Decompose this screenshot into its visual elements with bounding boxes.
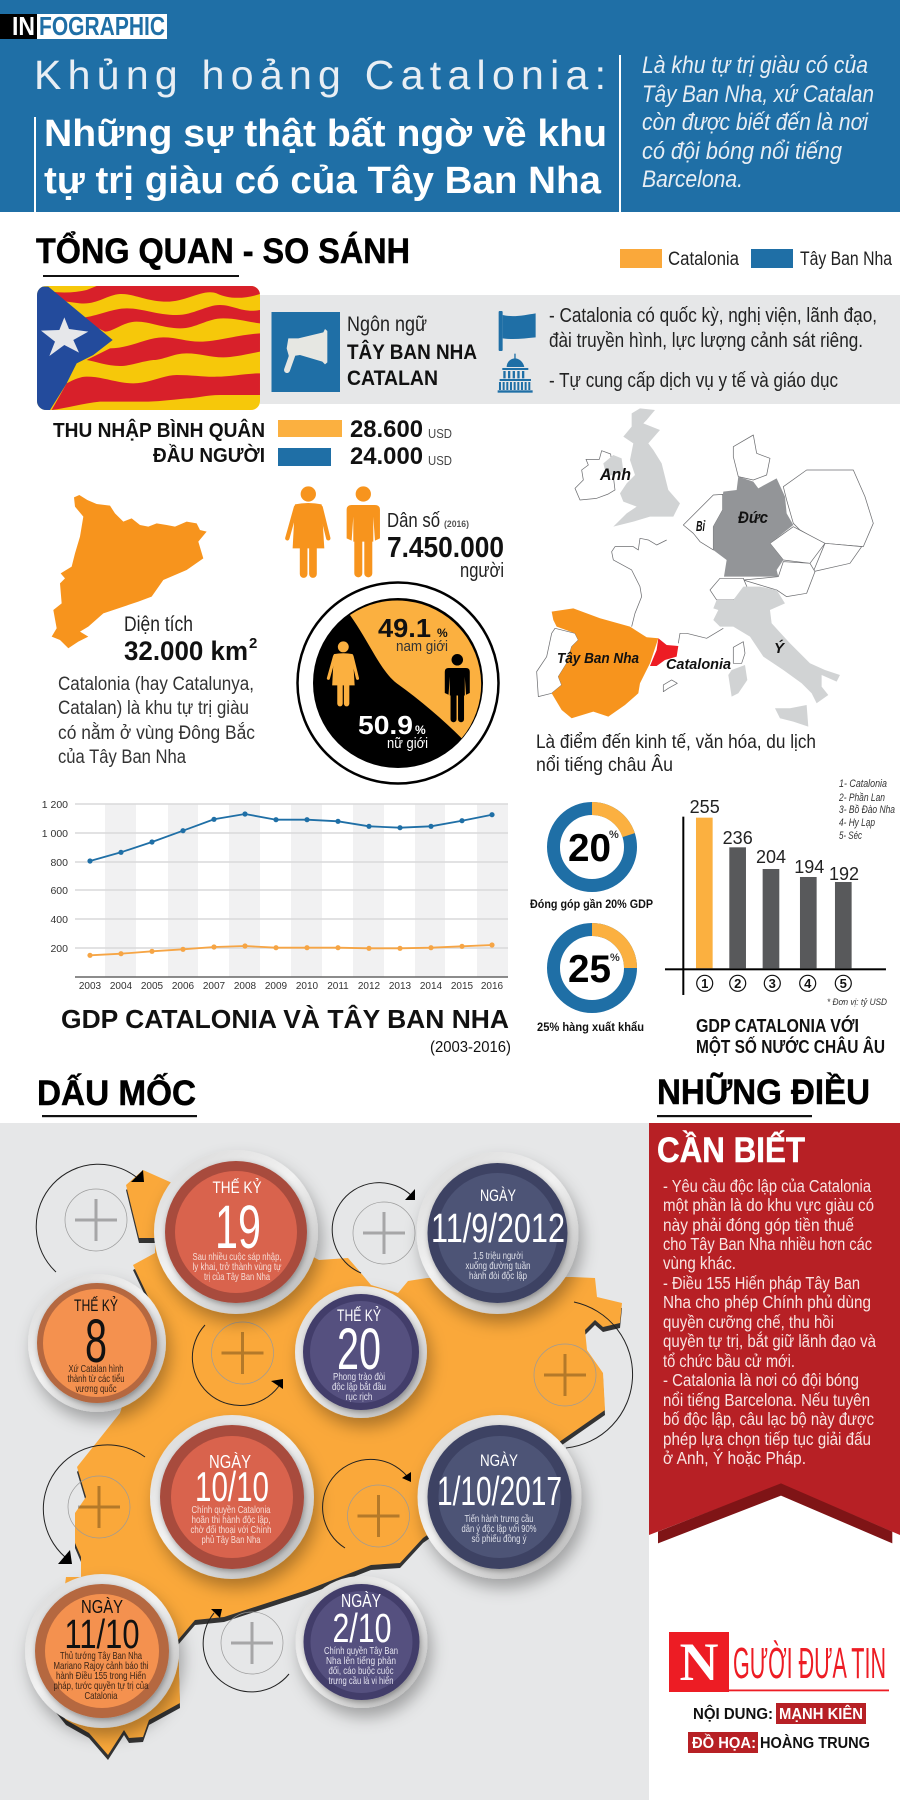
line chart: GDP: 1 200 — [42, 799, 68, 811]
milestone: 19th century: 19 — [215, 1193, 261, 1261]
gender pie chart: 49.1 — [378, 613, 431, 643]
line chart: GDP: 2012 — [358, 981, 381, 992]
icon: megaphone tile — [272, 312, 340, 392]
milestone: 19th century: THẾ KỶ — [212, 1178, 262, 1197]
intro text: Là khu tự trị giàu có của — [642, 52, 868, 79]
milestone: 19th century: trị của Tây Ban Nha — [204, 1271, 270, 1283]
legend — [620, 249, 892, 270]
icon: woman — [287, 486, 328, 574]
country: Spain — [552, 608, 658, 718]
gender pie chart: 50.9 — [358, 710, 413, 740]
map caption: nổi tiếng châu Âu — [536, 753, 673, 776]
map labels: Bỉ — [696, 518, 706, 535]
milestone: 8th century: vương quốc — [76, 1383, 116, 1395]
intro text: còn được biết đến là nơi — [642, 109, 869, 136]
milestone: 11/9/2012 — [416, 1152, 578, 1314]
milestone: 2/10: 2/10 — [332, 1605, 392, 1651]
line chart: GDP: 1 000 — [42, 828, 68, 840]
milestone: 2/10: trưng cầu là vi hiến — [328, 1675, 394, 1687]
icon: man small — [445, 654, 470, 719]
facts text — [549, 305, 877, 392]
country: Slovakia — [813, 543, 862, 572]
icon: woman small — [328, 641, 357, 704]
line chart: GDP: 2003 — [79, 981, 102, 992]
income comparison: USD — [428, 453, 452, 468]
line chart: GDP: 400 — [50, 914, 68, 926]
milestone: 19th century: Sau nhiều cuộc sáp nhập, — [192, 1251, 282, 1263]
heading: overview: TỔNG QUAN - SO SÁNH — [36, 231, 410, 271]
line chart: GDP: 200 — [50, 943, 68, 955]
milestone: 11/10: hành Điều 155 trong Hiến — [56, 1670, 146, 1682]
panel body text: quyền cưỡng chế, thu hồi — [663, 1312, 834, 1332]
bar chart title: GDP CATALONIA VỚI — [696, 1015, 859, 1036]
country: United Kingdom — [613, 408, 680, 527]
area stat — [124, 613, 257, 666]
main heading — [44, 113, 607, 202]
milestone: 8th century: Xứ Catalan hình — [68, 1363, 124, 1375]
map labels: Anh — [599, 465, 631, 484]
panel: timeline — [0, 1123, 649, 1800]
country: Germany — [713, 477, 793, 577]
map caption — [536, 731, 816, 776]
credits: MẠNH KIÊN — [779, 1705, 863, 1723]
map labels — [557, 465, 786, 673]
Catalonia description: Catalan) là khu tự trị giàu — [58, 698, 249, 719]
milestone: 8th century: THẾ KỶ — [74, 1296, 118, 1315]
gender pie chart: nữ giới — [387, 735, 428, 752]
line chart: GDP: 2007 — [203, 981, 226, 992]
milestone: 10/10 — [150, 1415, 314, 1579]
country: Belgium — [683, 494, 723, 550]
area stat: 32.000 km — [124, 636, 248, 666]
icon: Catalan flag — [37, 286, 260, 410]
milestone: 10/10: NGÀY — [209, 1452, 251, 1472]
milestone: 2/10: Chính quyền Tây Ban — [324, 1645, 398, 1657]
bar chart: GDP comparison: 194 — [794, 857, 824, 877]
milestone: 11/10: Catalonia — [84, 1690, 118, 1702]
country: Ireland — [575, 451, 615, 500]
milestone: 2/10 — [296, 1576, 428, 1708]
credits: NỘI DUNG: — [693, 1705, 773, 1723]
language text: Ngôn ngữ — [347, 313, 427, 336]
bar chart: GDP comparison: 3 — [769, 976, 776, 991]
bar chart: GDP comparison: 204 — [756, 847, 786, 867]
bar chart title — [696, 1015, 885, 1057]
panel: things to know — [649, 1123, 900, 1543]
credits: ĐỒ HỌA: — [692, 1734, 756, 1752]
population stat: Dân số — [387, 510, 440, 532]
income comparison: THU NHẬP BÌNH QUÂN — [53, 418, 265, 442]
main heading: Những sự thật bất ngờ về khu — [44, 113, 607, 155]
income comparison: USD — [428, 426, 452, 441]
milestone: 20th century — [295, 1286, 427, 1418]
population stat: 7.450.000 — [387, 532, 504, 564]
country: Italy — [713, 587, 840, 703]
donut: 25% of exports: 25 — [568, 948, 611, 991]
line chart: GDP: 2005 — [141, 981, 164, 992]
bar chart: GDP comparison: 236 — [723, 828, 753, 848]
panel body text: - Điều 155 Hiến pháp Tây Ban — [663, 1273, 860, 1293]
map labels: Ý — [774, 640, 786, 657]
intro text: Barcelona. — [642, 166, 743, 193]
panel body text: này phải đóng góp tiền thuế — [663, 1215, 854, 1235]
area stat: 2 — [249, 635, 257, 652]
line chart: GDP — [42, 799, 508, 992]
milestone: 11/10: NGÀY — [81, 1597, 123, 1617]
arrows — [36, 1164, 633, 1692]
logo: Người Đưa Tin — [669, 1632, 889, 1692]
milestone: 11/10: pháp, tước quyền tự trị của — [54, 1680, 149, 1692]
bar chart: GDP comparison: 255 — [690, 797, 720, 817]
milestone: 11/10: 11/10 — [64, 1611, 140, 1657]
milestone: 10/10: 10/10 — [195, 1463, 269, 1510]
milestone: 2/10: đối, cáo buộc cuộc — [328, 1665, 394, 1677]
map labels: Catalonia — [666, 656, 731, 673]
population stat: người — [460, 560, 504, 582]
milestone: 10/10: chờ đối thoại với Chính — [190, 1524, 272, 1536]
donut: 20% of GDP — [530, 808, 653, 911]
milestone: 2/10: NGÀY — [341, 1591, 381, 1611]
line chart: GDP: 2010 — [296, 981, 319, 992]
donut: 25% of exports — [537, 930, 644, 1034]
country: France — [612, 538, 667, 627]
milestone: 10/10: hoãn thi hành độc lập, — [192, 1514, 270, 1526]
panel body text: tổ chức bầu cử mới. — [663, 1351, 795, 1371]
intro text: có đội bóng nổi tiếng — [642, 138, 843, 165]
income comparison — [53, 416, 452, 470]
panel body text: - Catalonia là nơi có đội bóng — [663, 1370, 859, 1390]
panel body text: nổi tiếng Barcelona. Nếu tuyên — [663, 1390, 870, 1410]
ribbon fold — [658, 1483, 892, 1543]
country: Denmark — [733, 435, 770, 480]
intro text — [642, 52, 874, 193]
legend: Catalonia — [668, 249, 739, 270]
milestone: 1/10/2017: 1/10/2017 — [437, 1468, 562, 1514]
language text — [347, 313, 477, 390]
Catalonia description — [58, 674, 255, 768]
bar chart: GDP comparison — [665, 797, 886, 995]
panel heading: CẦN BIẾT — [657, 1130, 805, 1170]
population stat — [387, 510, 504, 582]
panel body text: phép lựa chọn tiếp tục giải đấu — [663, 1429, 871, 1449]
milestone: 11/9/2012: 1,5 triệu người — [473, 1250, 523, 1262]
milestone: 11/10: Mariano Rajoy cảnh báo thi — [54, 1660, 148, 1672]
country: Austria — [743, 562, 815, 597]
line chart: GDP: 2014 — [420, 981, 443, 992]
line chart: GDP: 800 — [50, 857, 68, 869]
panel body text: vùng khác. — [663, 1253, 736, 1273]
line chart: GDP: 2008 — [234, 981, 257, 992]
facts text: - Tự cung cấp dịch vụ y tế và giáo dục — [549, 370, 838, 392]
region: Catalonia — [650, 638, 678, 666]
area stat: Diện tích — [124, 613, 193, 636]
milestone: 20th century: THẾ KỶ — [337, 1306, 381, 1325]
panel body text: một phần là do khu vực giàu có — [663, 1195, 874, 1215]
line chart: GDP: 2006 — [172, 981, 195, 992]
line chart: GDP: 2004 — [110, 981, 133, 992]
tag: infographic: IN — [12, 11, 35, 41]
series: Spain — [87, 811, 495, 864]
title line: crisis: Khủng hoảng Catalonia: — [34, 52, 606, 98]
line chart: GDP: 2009 — [265, 981, 288, 992]
bar chart key: * Đơn vị: tỷ USD — [827, 997, 887, 1008]
milestone: 2/10: Nha lên tiếng phản — [326, 1655, 396, 1667]
Catalonia description: của Tây Ban Nha — [58, 747, 186, 768]
line chart: GDP: 2016 — [481, 981, 504, 992]
milestone: 11/9/2012: NGÀY — [480, 1186, 516, 1205]
milestone: 19th century: ly khai, trở thành vùng tự — [192, 1261, 282, 1273]
milestone: 11/9/2012: hành đòi độc lập — [469, 1270, 527, 1282]
bar chart: GDP comparison: 192 — [829, 864, 859, 884]
milestone: 1/10/2017 — [418, 1415, 582, 1579]
islands — [663, 680, 677, 692]
plus markers — [65, 1189, 596, 1674]
line chart title — [61, 1004, 511, 1056]
panel body text: Nha cho phép Chính phủ dùng — [663, 1292, 871, 1312]
milestone: 1/10/2017: NGÀY — [480, 1451, 518, 1470]
map labels: Tây Ban Nha — [557, 650, 639, 667]
country: Switzerland — [710, 578, 748, 600]
milestone: 20th century: rục rịch — [346, 1391, 373, 1403]
Catalonia description: Catalonia (hay Catalunya, — [58, 674, 254, 695]
info band — [260, 295, 900, 404]
donut: 25% of exports: 25% hàng xuất khẩu — [537, 1022, 644, 1034]
tag: infographic: FOGRAPHIC — [39, 11, 165, 41]
header banner — [0, 0, 900, 212]
gender pie chart: nam giới — [396, 638, 448, 655]
income comparison: 24.000 — [350, 443, 423, 470]
milestone: 8th century — [28, 1274, 166, 1412]
credits: HOÀNG TRUNG — [760, 1735, 870, 1752]
bar chart: GDP comparison: 5 — [840, 976, 847, 991]
line chart: GDP: 600 — [50, 885, 68, 897]
panel body text — [663, 1176, 876, 1468]
line chart title: GDP CATALONIA VÀ TÂY BAN NHA — [61, 1004, 509, 1034]
logo: Người Đưa Tin: N — [680, 1632, 718, 1692]
milestone: 1/10/2017: Tiến hành trưng cầu — [464, 1513, 534, 1525]
milestone: 11/10 — [25, 1574, 179, 1728]
line chart title: (2003-2016) — [430, 1039, 511, 1056]
milestone: 8th century: thành từ các tiểu — [68, 1373, 125, 1385]
milestone: 8th century: 8 — [85, 1307, 107, 1375]
line chart: GDP: 2015 — [451, 981, 474, 992]
main heading: tự trị giàu có của Tây Ban Nha — [44, 160, 602, 202]
income comparison: 28.600 — [350, 416, 423, 443]
heading: things to know: NHỮNG ĐIỀU — [657, 1072, 870, 1112]
gender pie chart: % — [437, 626, 448, 640]
milestone: 11/9/2012: xuống đường tuần — [466, 1260, 531, 1272]
milestone: 20th century: Phong trào đòi — [333, 1371, 385, 1383]
milestone: 11/9/2012: 11/9/2012 — [431, 1205, 565, 1251]
bar chart key: 2- Phần Lan — [838, 792, 885, 804]
milestone: 20th century: 20 — [337, 1317, 381, 1382]
map: Catalonia — [52, 495, 207, 648]
population stat: (2016) — [444, 519, 469, 529]
icon: flag — [499, 311, 536, 351]
milestone: 1/10/2017: dân ý độc lập với 90% — [462, 1523, 536, 1535]
bar chart: GDP comparison: 4 — [804, 976, 812, 991]
line chart: GDP: 2011 — [327, 981, 349, 992]
milestone: 1/10/2017: số phiếu đồng ý — [472, 1533, 527, 1545]
country: Czechia — [770, 527, 825, 563]
icon: capitol building — [498, 354, 533, 393]
gender pie chart: % — [415, 723, 426, 737]
milestone: 20th century: độc lập bắt đầu — [332, 1380, 386, 1393]
series: Catalonia — [87, 942, 495, 958]
panel body text: ở Anh, Ý hoặc Pháp. — [663, 1448, 806, 1468]
milestone: 19th century — [154, 1150, 318, 1314]
donut: 20% of GDP: 20 — [568, 827, 611, 870]
bar chart key: 5- Séc — [839, 830, 862, 842]
credits — [688, 1703, 870, 1753]
donut: 20% of GDP: Đóng góp gần 20% GDP — [530, 899, 653, 911]
bar chart key — [827, 778, 895, 1008]
heading: milestones: DẤU MỐC — [37, 1073, 196, 1113]
language text: TÂY BAN NHA — [347, 340, 477, 364]
map: Catalonia timeline backdrop — [50, 1170, 622, 1760]
Catalonia description: có nằm ở vùng Đông Bắc — [58, 722, 255, 744]
tag: infographic — [0, 11, 167, 41]
income comparison: ĐẦU NGƯỜI — [153, 443, 265, 467]
bar chart: GDP comparison: 1 — [701, 976, 708, 991]
milestone: 11/10: Thủ tướng Tây Ban Nha — [60, 1650, 142, 1662]
line chart: GDP: 2013 — [389, 981, 412, 992]
country: Portugal — [537, 628, 578, 697]
donut: 20% of GDP: % — [609, 829, 619, 841]
milestone: 10/10: Chính quyền Catalonia — [192, 1504, 271, 1516]
map labels: Đức — [738, 508, 768, 527]
language text: CATALAN — [347, 367, 438, 390]
bar chart key: 4- Hy Lạp — [839, 817, 875, 829]
country: Poland — [783, 470, 873, 547]
donut: 25% of exports: % — [610, 952, 620, 964]
icon: man — [347, 486, 380, 573]
map: Europe — [537, 408, 873, 727]
bar chart: GDP comparison: 2 — [734, 976, 741, 991]
bar chart key: 1- Catalonia — [839, 778, 887, 790]
map caption: Là điểm đến kinh tế, văn hóa, du lịch — [536, 731, 816, 753]
milestone: 10/10: phủ Tây Ban Nha — [202, 1534, 261, 1546]
gender pie chart — [298, 582, 498, 784]
